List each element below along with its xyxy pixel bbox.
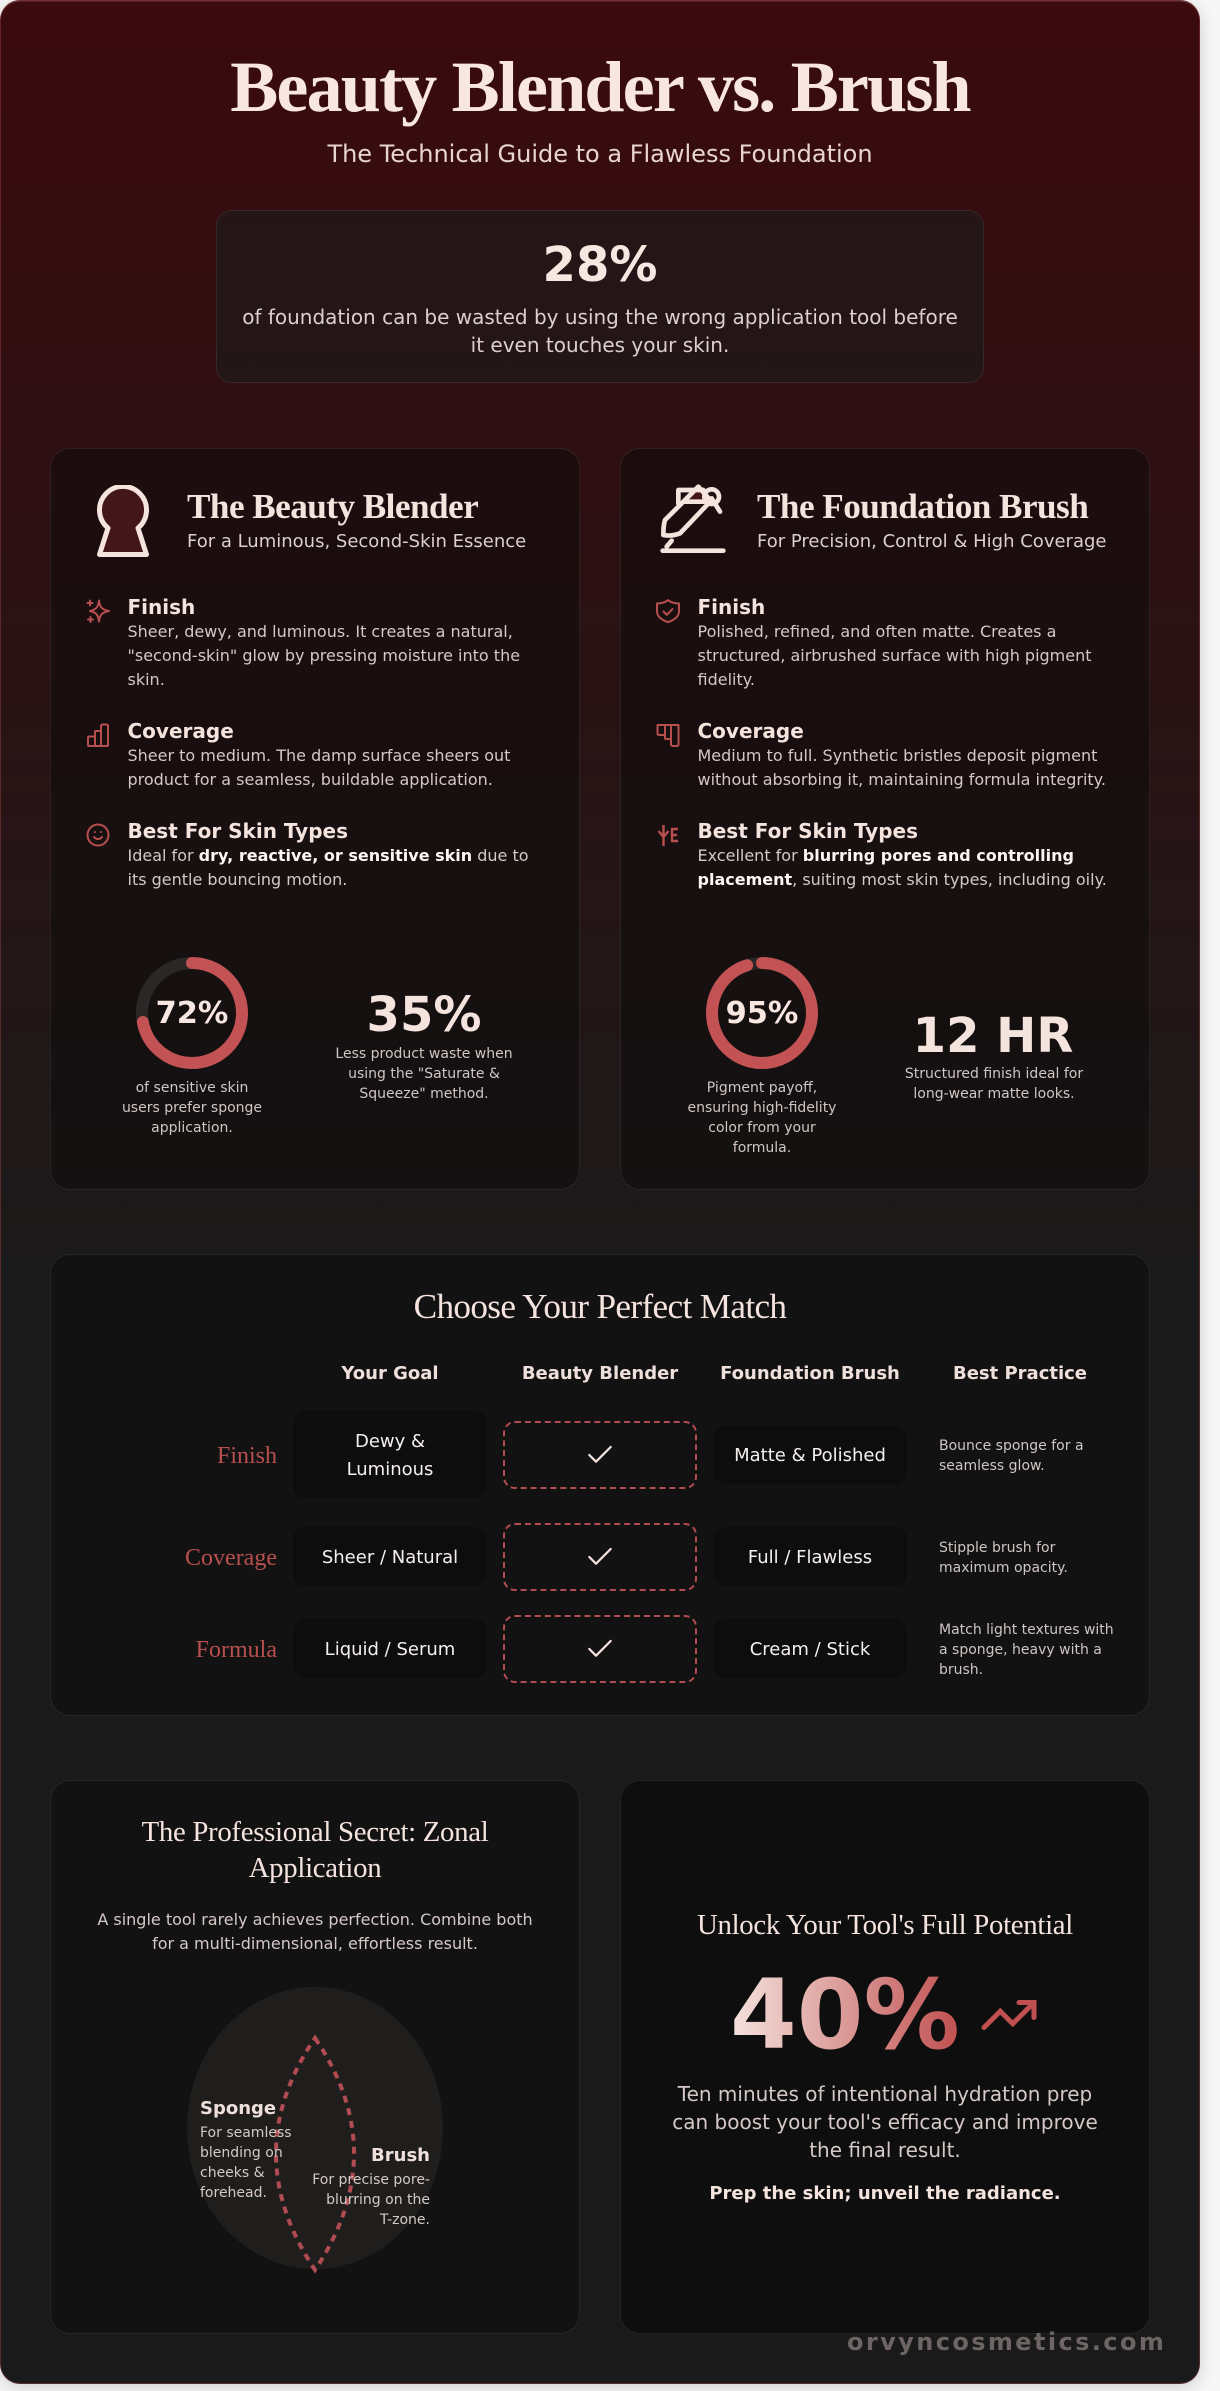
feature: best for skin types <box>658 819 1107 889</box>
ring caption: application. <box>151 1120 233 1136</box>
feature: best for skin types: Ideal for dry, reactive, or sensitive skin due to <box>128 846 529 865</box>
feature: finish <box>86 595 520 689</box>
row: formula: Formula <box>196 1637 277 1663</box>
panel text: the final result. <box>809 2138 961 2162</box>
column headers: Beauty Blender <box>522 1363 678 1384</box>
feature: best for skin types: Best For Skin Types <box>128 819 348 843</box>
feature: finish: skin. <box>128 670 165 689</box>
feature: best for skin types: Best For Skin Types <box>698 819 918 843</box>
heading: the beauty blender: The Beauty Blender <box>187 487 478 526</box>
icon: bars <box>87 724 109 747</box>
feature: finish: Finish <box>128 595 195 619</box>
ring caption: ensuring high-fidelity <box>688 1100 836 1116</box>
brush label: T-zone. <box>380 2212 430 2228</box>
row: finish: Bounce sponge for a <box>939 1438 1084 1454</box>
icon: inverted bars <box>656 724 680 747</box>
feature: coverage: Sheer to medium. The damp surface sheers out <box>128 746 510 765</box>
callout text <box>242 305 958 357</box>
feature: finish <box>656 595 1092 689</box>
subheading: For Precision, Control & High Coverage <box>757 531 1106 552</box>
stat caption: Less product waste when <box>335 1046 513 1062</box>
panel heading: The Professional Secret: Zonal <box>142 1816 488 1848</box>
row: coverage: Full / Flawless <box>748 1546 872 1568</box>
row: formula: Liquid / Serum <box>325 1638 455 1660</box>
icon: sponge <box>97 485 149 557</box>
feature: coverage: product for a seamless, buildable application. <box>128 770 493 789</box>
feature: coverage: Coverage <box>128 719 234 743</box>
ring caption: of sensitive skin <box>136 1080 248 1096</box>
feature: coverage: without absorbing it, maintaining formula integrity. <box>698 770 1106 789</box>
brush label: For precise pore- <box>312 2172 430 2188</box>
row: coverage <box>185 1523 1068 1591</box>
feature: best for skin types: Excellent for blurring pores and controlling <box>698 846 1074 865</box>
subtitle: The Technical Guide to a Flawless Foundation <box>327 140 873 168</box>
panel: the beauty blender <box>50 448 580 1190</box>
row: finish: seamless glow. <box>939 1458 1045 1474</box>
brush label: blurring on the <box>326 2192 430 2208</box>
ring chart: 72% <box>136 957 248 1069</box>
callout number: 28% <box>543 237 657 293</box>
feature: finish: Finish <box>698 595 765 619</box>
callout: 28% wasted foundation <box>216 210 984 383</box>
sponge label: cheeks & <box>200 2165 265 2181</box>
feature: coverage <box>656 719 1106 789</box>
table heading: Choose Your Perfect Match <box>414 1287 786 1326</box>
row: finish: Dewy & <box>355 1430 425 1452</box>
ring caption: Pigment payoff, <box>707 1080 817 1096</box>
big number: 40%: 40% <box>730 1959 960 2071</box>
stat caption: Structured finish ideal for <box>905 1066 1083 1082</box>
panel: unlock potential <box>620 1780 1150 2334</box>
callout text: of foundation can be wasted by using the wrong application tool before <box>242 305 958 329</box>
row: formula: a sponge, heavy with a <box>939 1642 1102 1658</box>
callout text: it even touches your skin. <box>471 333 729 357</box>
panel intro text <box>97 1910 533 1953</box>
stat caption <box>335 1046 513 1102</box>
stat caption: Squeeze" method. <box>359 1086 489 1102</box>
panel heading: Application <box>249 1852 381 1884</box>
icon: smile <box>86 824 110 846</box>
ring caption: formula. <box>733 1140 791 1156</box>
panel intro text: for a multi-dimensional, effortless result. <box>152 1934 478 1953</box>
row: formula: Match light textures with <box>939 1622 1114 1638</box>
feature: best for skin types <box>86 819 529 889</box>
panel: zonal application <box>50 1780 580 2334</box>
ring caption: users prefer sponge <box>122 1100 262 1116</box>
brush label <box>312 2145 430 2228</box>
feature: best for skin types: its gentle bouncing motion. <box>128 870 347 889</box>
panel text: can boost your tool's efficacy and improve <box>672 2110 1098 2134</box>
watermark: orvyncosmetics.com <box>847 2328 1166 2356</box>
title: Beauty Blender vs. Brush <box>230 47 970 127</box>
feature: finish: Polished, refined, and often matte. Creates a <box>698 622 1056 641</box>
brush label: Brush <box>371 2145 430 2166</box>
stat: 12 HR: 12 HR <box>913 1008 1073 1064</box>
icon: brush <box>660 484 726 553</box>
feature: best for skin types: placement, suiting most skin types, including oily. <box>698 870 1107 889</box>
row: finish <box>217 1421 1084 1489</box>
feature: finish: Sheer, dewy, and luminous. It creates a natural, <box>128 622 513 641</box>
panel text: Ten minutes of intentional hydration prep <box>678 2082 1092 2106</box>
column headers: Best Practice <box>953 1363 1087 1384</box>
icon: sparkles <box>86 600 110 623</box>
feature: coverage <box>87 719 510 789</box>
ring chart: 72%: 72% <box>156 996 228 1031</box>
stat caption <box>905 1066 1084 1102</box>
sponge label <box>200 2098 292 2201</box>
ring caption <box>122 1080 262 1136</box>
tagline: Prep the skin; unveil the radiance. <box>709 2183 1061 2204</box>
sponge label: Sponge <box>200 2098 276 2119</box>
sponge label: For seamless <box>200 2125 292 2141</box>
panel heading <box>142 1816 488 1884</box>
stat: 35%: 35% <box>367 987 481 1043</box>
icon: trending up arrow <box>982 2000 1036 2030</box>
ring caption: color from your <box>708 1120 816 1136</box>
row: finish: Luminous <box>347 1458 433 1480</box>
panel: comparison table <box>50 1254 1150 1716</box>
face oval <box>187 1987 443 2269</box>
panel intro text: A single tool rarely achieves perfection. Combine both <box>97 1910 533 1929</box>
icon: shield check <box>656 599 680 623</box>
feature: finish: "second-skin" glow by pressing moisture into the <box>128 646 520 665</box>
feature: coverage: Coverage <box>698 719 804 743</box>
heading: the foundation brush: The Foundation Brush <box>757 487 1088 526</box>
panel heading: Unlock Your Tool's Full Potential <box>697 1909 1073 1941</box>
panel: the foundation brush <box>620 448 1150 1190</box>
column headers: Foundation Brush <box>720 1363 900 1384</box>
ring caption <box>688 1080 836 1156</box>
panel text <box>672 2082 1098 2162</box>
feature: finish: structured, airbrushed surface with high pigment <box>698 646 1092 665</box>
row: finish: Matte & Polished <box>734 1445 886 1466</box>
subheading: For a Luminous, Second-Skin Essence <box>187 531 526 552</box>
feature: coverage: Medium to full. Synthetic bristles deposit pigment <box>698 746 1097 765</box>
row: finish: Finish <box>217 1443 277 1469</box>
row: coverage: maximum opacity. <box>939 1560 1068 1576</box>
stat caption: long-wear matte looks. <box>913 1086 1075 1102</box>
stat caption: using the "Saturate & <box>348 1066 500 1082</box>
dashed zone lens <box>274 2034 356 2274</box>
row: formula: brush. <box>939 1662 983 1678</box>
ring chart: 95% <box>706 957 818 1069</box>
sponge label: forehead. <box>200 2185 267 2201</box>
ring chart: 95%: 95% <box>726 996 798 1031</box>
row: coverage: Stipple brush for <box>939 1540 1055 1556</box>
column headers <box>341 1363 1087 1384</box>
sponge label: blending on <box>200 2145 283 2161</box>
feature: finish: fidelity. <box>698 670 755 689</box>
icon: bristles <box>658 825 678 846</box>
row: formula: Cream / Stick <box>750 1638 870 1660</box>
row: coverage: Coverage <box>185 1545 277 1571</box>
row: formula <box>196 1615 1114 1683</box>
row: coverage: Sheer / Natural <box>322 1546 458 1568</box>
column headers: Your Goal <box>341 1363 439 1384</box>
zonal diagram <box>187 1987 443 2274</box>
